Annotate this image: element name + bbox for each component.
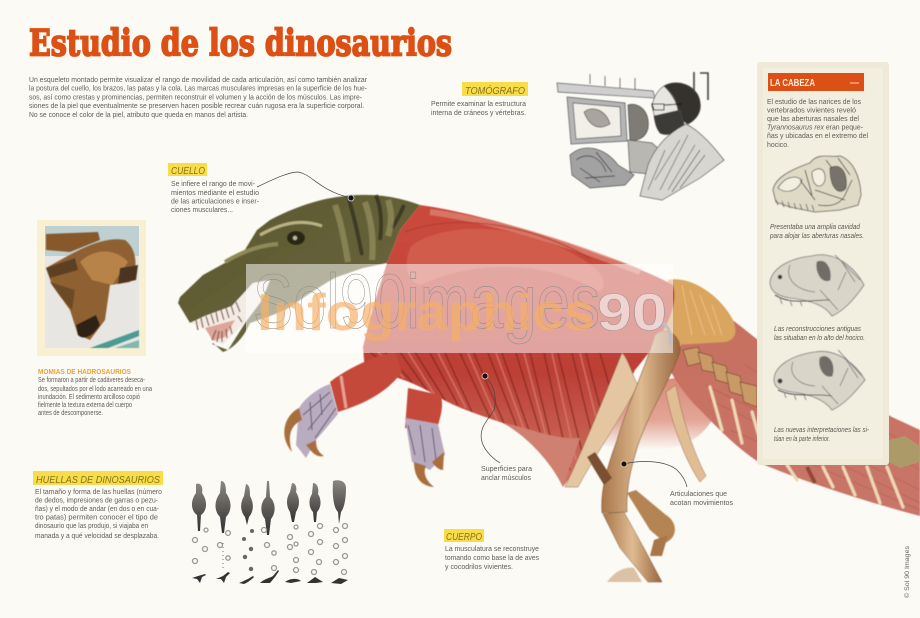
callout: huellas: dinosaurio que las produjo, si viajaba en <box>35 521 148 530</box>
panel heading <box>768 73 864 91</box>
eye <box>287 231 305 245</box>
face <box>652 86 678 124</box>
caption 2 <box>774 324 865 342</box>
footprints chart <box>192 480 348 584</box>
pointer: joints <box>621 461 687 487</box>
pointer: neck <box>257 172 354 201</box>
glasses <box>652 104 682 110</box>
tail ribs <box>710 387 903 507</box>
dark rear bone <box>587 452 612 485</box>
callout: huellas: tro patas) permiten conocer el tipo de <box>35 512 158 522</box>
panel intro text <box>767 97 868 149</box>
callout: tomografo: Permite examinar la estructura <box>431 99 527 108</box>
callout: cuerpo <box>444 529 539 571</box>
callout: cuerpo: y cocodrilos vivientes. <box>445 562 513 571</box>
intro text: la postura del cuello, los brazos, las patas y la cola. Las marcas musculares impresas en la superficie de los hue- <box>29 84 367 93</box>
panel intro text: que las aberturas nasales del <box>767 114 859 123</box>
dinosaur illustration <box>178 195 920 582</box>
track 3 <box>239 484 254 584</box>
callout: cuello: CUELLO <box>171 165 205 177</box>
skull sketch: fossil <box>773 156 861 212</box>
panel intro text: El estudio de las narices de los <box>767 97 861 106</box>
track 5 <box>285 483 301 583</box>
callout: huellas: El tamaño y forma de las huellas (número <box>35 487 162 496</box>
callout: cuerpo: CUERPO <box>446 531 482 543</box>
skull model <box>570 148 634 188</box>
intro text <box>29 75 367 119</box>
callout: huellas <box>33 471 163 540</box>
label: superficies: anclar músculos <box>481 473 531 482</box>
tail vertebrae <box>683 347 757 407</box>
callout: huellas: ñas) y el modo de andar (en dos o en cua- <box>35 504 159 513</box>
mummy text <box>38 367 152 417</box>
label: articulaciones <box>670 489 733 507</box>
caption 3: túan en la parte inferior. <box>774 434 830 443</box>
lower flank muscle <box>503 423 580 487</box>
track 2 <box>216 481 230 583</box>
callout: cuello: Se infiere el rango de movi- <box>171 179 255 188</box>
caption 2: Las reconstrucciones antiguas <box>774 324 861 333</box>
label: superficies <box>481 464 533 482</box>
round scanner <box>628 104 648 140</box>
mummy photo <box>37 220 146 356</box>
caption 2: las situaban en lo alto del hocico. <box>774 333 865 342</box>
label: articulaciones: Articulaciones que <box>670 489 727 498</box>
beard <box>654 110 684 134</box>
watermark band: 90 <box>597 284 667 342</box>
panel intro text: hocico. <box>767 140 789 149</box>
callout: tomografo: TOMÓGRAFO <box>465 84 525 97</box>
pubis <box>666 385 706 482</box>
mummy text: Se formaron a partir de cadáveres deseca- <box>38 377 146 384</box>
skull sketch: new interpretation <box>774 350 865 410</box>
callout: cuello: de las articulaciones e inser- <box>171 196 259 206</box>
intro text: No se conoce el color de la piel, atributo que queda en manos del artista. <box>29 110 248 119</box>
mummy text: antes de descomponerse. <box>38 410 103 417</box>
callout: cuerpo: La musculatura se reconstruye <box>445 544 539 553</box>
callout: tomografo: interna de cráneos y vértebras. <box>431 108 526 117</box>
panel: la cabeza <box>757 62 889 465</box>
caption 3 <box>774 425 870 443</box>
hip muscle <box>655 279 735 345</box>
callout: cuerpo: tomando como base la de aves <box>445 553 539 562</box>
track 7 <box>331 480 348 584</box>
muscle behind femur <box>595 375 712 450</box>
caption 1: para alojar las aberturas nasales. <box>769 231 864 240</box>
hair <box>664 83 700 124</box>
track 6 <box>307 483 323 583</box>
tibia <box>603 512 662 582</box>
neck lobes <box>407 229 604 292</box>
caption 1: Presentaba una amplia cavidad <box>770 222 861 231</box>
mummy text: fielmente la textura externa del cuerpo <box>38 402 132 409</box>
coat <box>640 124 724 200</box>
caption 3: Las nuevas interpretaciones las si- <box>774 425 870 434</box>
intro text: siones de la piel que eventualmente se preserven hacen posible recrear cuán rugosa era la superficie corporal. <box>29 101 364 110</box>
intro text: Un esqueleto montado permite visualizar el rango de movilidad de cada articulación, así como también analizar <box>29 75 367 84</box>
skull sketch: old reconstruction <box>770 255 864 316</box>
intro text: sos, así como crestas y prominencias, permiten reconstruir el volumen y la acción de los músculos. Las impre- <box>29 92 362 101</box>
body muscles <box>363 205 674 487</box>
mummy text: MOMIAS DE HADROSAURIOS <box>38 367 131 376</box>
callout: huellas: HUELLAS DE DINOSAURIOS <box>36 474 160 486</box>
mummy text: dos, sepultados por el lodo acarreado en una <box>38 386 152 393</box>
callout: tomografo <box>431 82 528 117</box>
callout: huellas: manada y a qué velocidad se desplazaba. <box>35 531 159 540</box>
callout: huellas: de dedos, impresiones de garras o pezu- <box>35 496 158 504</box>
caption 1 <box>769 222 864 240</box>
title: Estudio de los dinosaurios <box>29 22 452 64</box>
femur <box>602 331 680 513</box>
pointer: muscle <box>481 373 500 463</box>
shelf <box>557 83 655 98</box>
illustration: scientist at tomograph <box>557 72 724 200</box>
arm left <box>284 352 402 458</box>
arm right <box>405 388 445 487</box>
label: superficies: Superficies para <box>481 464 533 473</box>
panel intro text: vertebrados vivientes reveló <box>767 106 856 114</box>
head and neck <box>178 195 420 352</box>
upper foot <box>627 490 675 543</box>
label: articulaciones: acotan movimientos <box>670 498 733 507</box>
watermark band: Sol90images <box>253 259 600 345</box>
callout: cuello <box>168 163 259 214</box>
tail <box>670 300 920 516</box>
callout: cuello: mientos mediante el estudio <box>171 188 259 197</box>
tail tip detail <box>889 436 920 468</box>
mummy text: inundación. El sedimento arcilloso copió <box>38 394 140 401</box>
panel intro text: Tyrannosaurus rex eran peque- <box>767 122 863 132</box>
neck stripes <box>348 195 404 255</box>
mouth <box>190 280 270 345</box>
callout: cuello: ciones musculares... <box>171 205 233 214</box>
credit: © Sol 90 Images <box>904 546 911 598</box>
leg skeleton <box>565 323 706 582</box>
watermark band: Infographics <box>257 284 595 342</box>
panel intro text: ñas y ubicadas en el extremo del <box>767 131 868 140</box>
track 1 <box>192 484 208 583</box>
monitor <box>567 97 627 144</box>
muscle striations <box>370 352 612 470</box>
track 4 <box>260 481 279 583</box>
ischium <box>565 353 638 487</box>
panel heading: LA CABEZA <box>770 78 815 89</box>
hip fibres <box>682 285 722 335</box>
